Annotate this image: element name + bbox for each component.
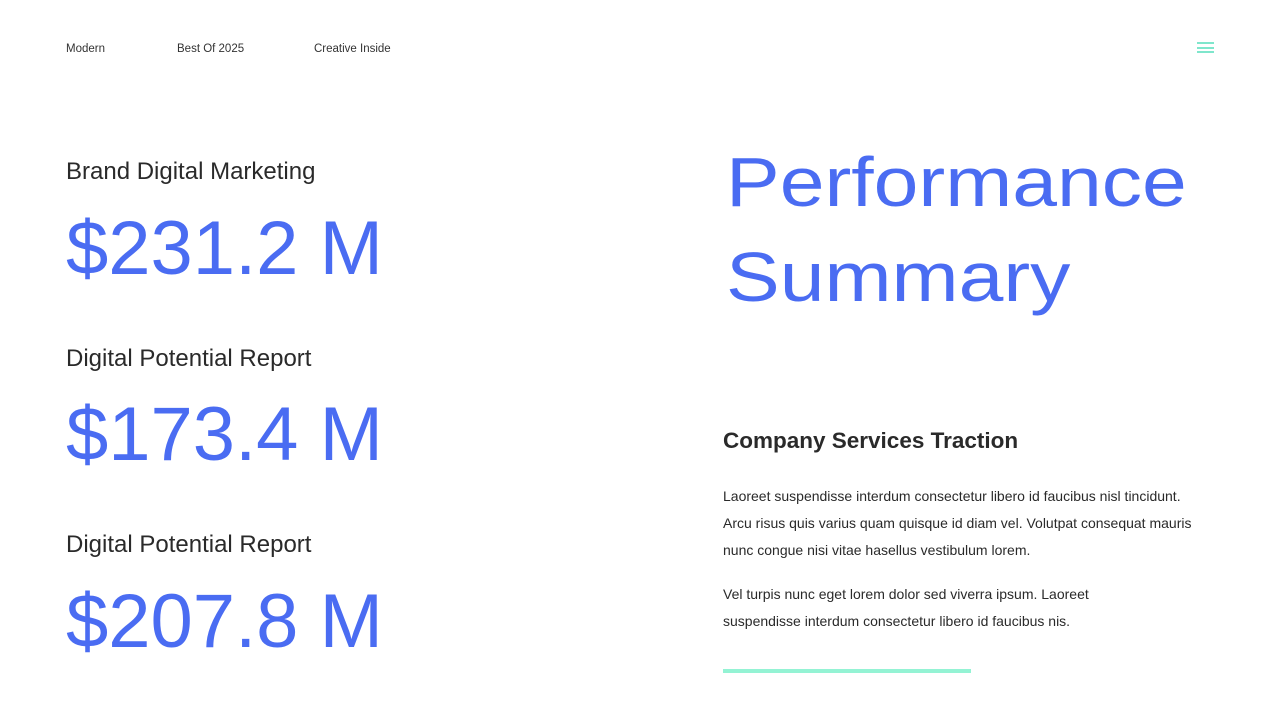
title: Summary	[726, 238, 1070, 316]
nav: Best Of 2025: Best Of 2025	[177, 43, 244, 55]
title	[726, 143, 1187, 316]
label 3: Digital Potential Report	[66, 531, 311, 558]
accent line	[723, 669, 971, 673]
heading: Company Services Traction	[723, 428, 1018, 453]
number 1: $231.2 M	[66, 206, 383, 291]
paragraph 2: Vel turpis nunc eget lorem dolor sed viverra ipsum. Laoreet suspendisse interdum consectetur libero id faucibus nis.	[723, 586, 1089, 629]
title: Performance	[726, 143, 1187, 221]
icon: menu	[1197, 42, 1214, 53]
number 3: $207.8 M	[66, 579, 383, 664]
nav: Creative Inside: Creative Inside	[314, 43, 391, 55]
nav: Modern: Modern	[66, 43, 105, 55]
number 2: $173.4 M	[66, 392, 383, 477]
label 1: Brand Digital Marketing	[66, 158, 315, 185]
label 2: Digital Potential Report	[66, 345, 311, 372]
paragraph 1: Laoreet suspendisse interdum consectetur libero id faucibus nisl tincidunt. Arcu risus quis varius quam quisque id diam vel. Volutpat consequat mauris nunc congue nisi vitae hasellus vestibulum lorem.	[723, 488, 1191, 558]
